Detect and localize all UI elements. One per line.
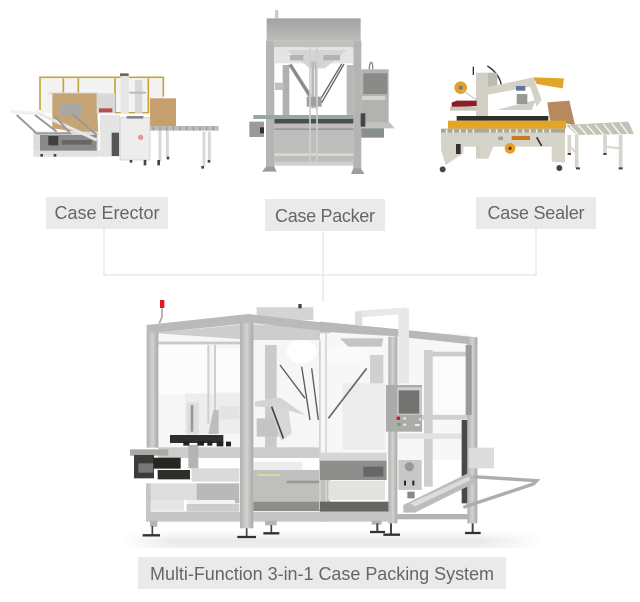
label: Case Packer: Case Packer (275, 206, 375, 226)
label: Case Erector: Case Erector (54, 203, 160, 223)
label: Case Erector (46, 197, 168, 229)
label: Multi-Function 3-in-1 Case Packing System (138, 557, 506, 589)
machine left half (130, 300, 330, 537)
connector lines (104, 229, 536, 302)
icon: case erector machine (10, 73, 219, 169)
machine right half (320, 308, 537, 535)
icon: case packer machine (249, 10, 395, 174)
icon: case sealer machine (440, 66, 634, 172)
label: Multi-Function 3-in-1 Case Packing System: Multi-Function 3-in-1 Case Packing System (150, 564, 494, 584)
label: Case Sealer: Case Sealer (488, 203, 584, 223)
label: Case Sealer (476, 197, 596, 229)
label: Case Packer (265, 199, 385, 231)
illustration: 3-in-1 case packing system machine (130, 300, 537, 537)
icon: floor shadow (123, 530, 543, 548)
